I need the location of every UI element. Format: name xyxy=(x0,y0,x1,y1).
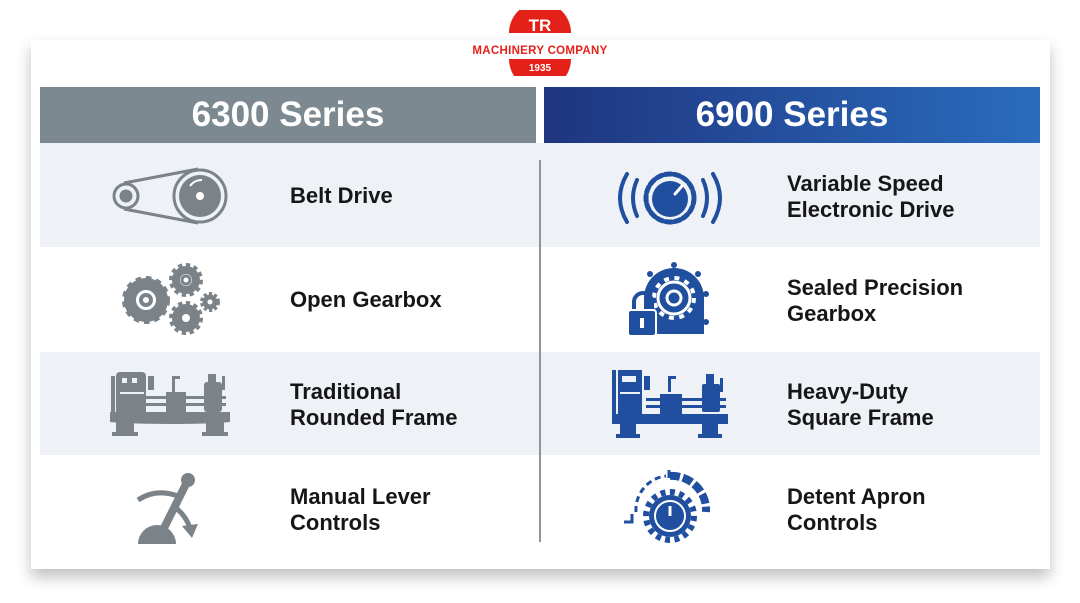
icon: manual lever xyxy=(136,473,198,544)
logo: 1935 xyxy=(529,63,552,74)
text: Sealed Precision Gearbox: Sealed Precision xyxy=(787,275,963,300)
text: Sealed Precision Gearbox xyxy=(787,275,963,326)
text: Variable Speed Electronic Drive: Variable Speed xyxy=(787,171,944,196)
text: Variable Speed Electronic Drive: Electronic Drive xyxy=(787,197,955,222)
text: Detent Apron Controls: Detent Apron xyxy=(787,484,926,509)
text: Heavy-Duty Square Frame: Square Frame xyxy=(787,405,934,430)
header: 6900 Series: 6900 Series xyxy=(696,95,888,134)
divider xyxy=(539,160,541,542)
text: Manual Lever Controls xyxy=(290,484,431,535)
text: Manual Lever Controls: Controls xyxy=(290,510,380,535)
icon: belt drive xyxy=(112,168,228,224)
logo xyxy=(472,10,608,76)
text: Variable Speed Electronic Drive xyxy=(787,171,955,222)
text: Traditional Rounded Frame: Traditional xyxy=(290,379,401,404)
header: 6900 Series xyxy=(544,87,1040,143)
text: Traditional Rounded Frame: Rounded Frame xyxy=(290,405,457,430)
icon: variable speed knob xyxy=(618,172,722,224)
logo: MACHINERY COMPANY xyxy=(472,45,608,57)
text: Heavy-Duty Square Frame: Heavy-Duty xyxy=(787,379,908,404)
icon: detent dial xyxy=(624,470,710,543)
row backgrounds xyxy=(40,143,1040,247)
header: 6300 Series xyxy=(40,87,536,143)
logo: TR xyxy=(529,16,551,35)
text: Belt Drive: Belt Drive xyxy=(290,183,393,208)
icon: heavy-duty lathe xyxy=(612,370,728,438)
header: 6300 Series: 6300 Series xyxy=(192,95,384,134)
text: Detent Apron Controls xyxy=(787,484,926,535)
icon: open gearbox xyxy=(122,263,220,335)
text: Detent Apron Controls: Controls xyxy=(787,510,877,535)
text: Traditional Rounded Frame xyxy=(290,379,457,430)
text: Manual Lever Controls: Manual Lever xyxy=(290,484,431,509)
icon: traditional lathe xyxy=(110,372,230,436)
icon: sealed gearbox xyxy=(629,262,709,335)
text: Heavy-Duty Square Frame xyxy=(787,379,934,430)
text: Sealed Precision Gearbox: Gearbox xyxy=(787,301,876,326)
text: Open Gearbox: Open Gearbox xyxy=(290,287,442,312)
